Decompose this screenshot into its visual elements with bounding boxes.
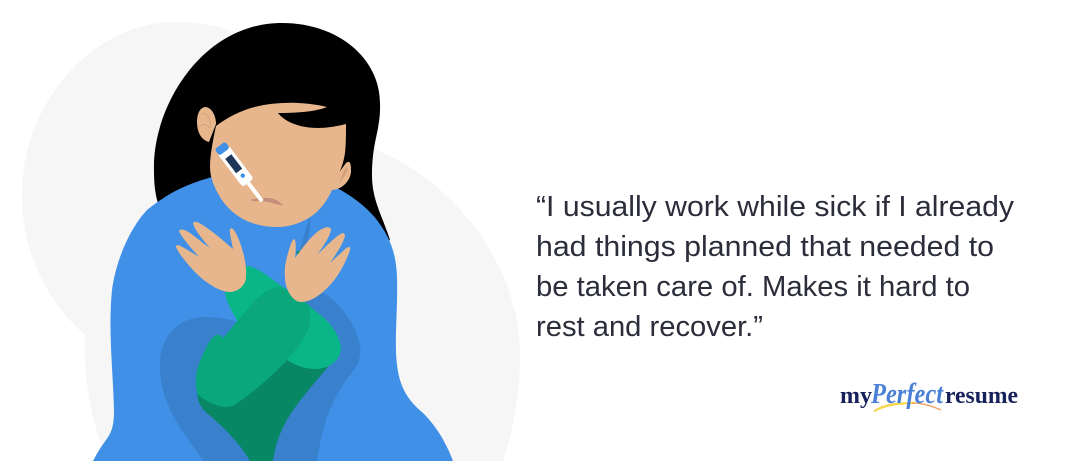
light green back arm	[225, 266, 341, 369]
quote text: be taken care of. Makes it hard to	[536, 271, 970, 303]
logo: myPerfectResume: Perfect	[870, 378, 944, 410]
quote text: “I usually work while sick if I already	[536, 191, 1015, 223]
quote text	[536, 191, 1015, 343]
logo: myPerfectResume: resume	[945, 383, 1018, 409]
quote text: had things planned that needed to	[536, 231, 994, 263]
illustration: sick woman with thermometer	[93, 23, 453, 461]
logo: myPerfectResume	[840, 378, 1018, 412]
blue blanket	[93, 177, 453, 461]
left ear	[197, 107, 216, 142]
hair	[154, 23, 390, 260]
thermometer	[214, 141, 268, 205]
right hand	[285, 227, 350, 302]
lips	[250, 198, 283, 206]
head and face	[197, 103, 351, 227]
right ear	[331, 162, 351, 190]
left hand	[176, 222, 246, 292]
background blob	[22, 22, 520, 461]
mid green front arm	[196, 287, 310, 407]
blanket inner shadow	[160, 293, 360, 461]
neck fold	[299, 216, 310, 252]
logo wordmark: my	[840, 383, 872, 409]
dark green torso	[197, 358, 328, 461]
logo swoosh	[873, 402, 915, 412]
face	[210, 103, 346, 227]
quote text: rest and recover.”	[536, 311, 763, 343]
